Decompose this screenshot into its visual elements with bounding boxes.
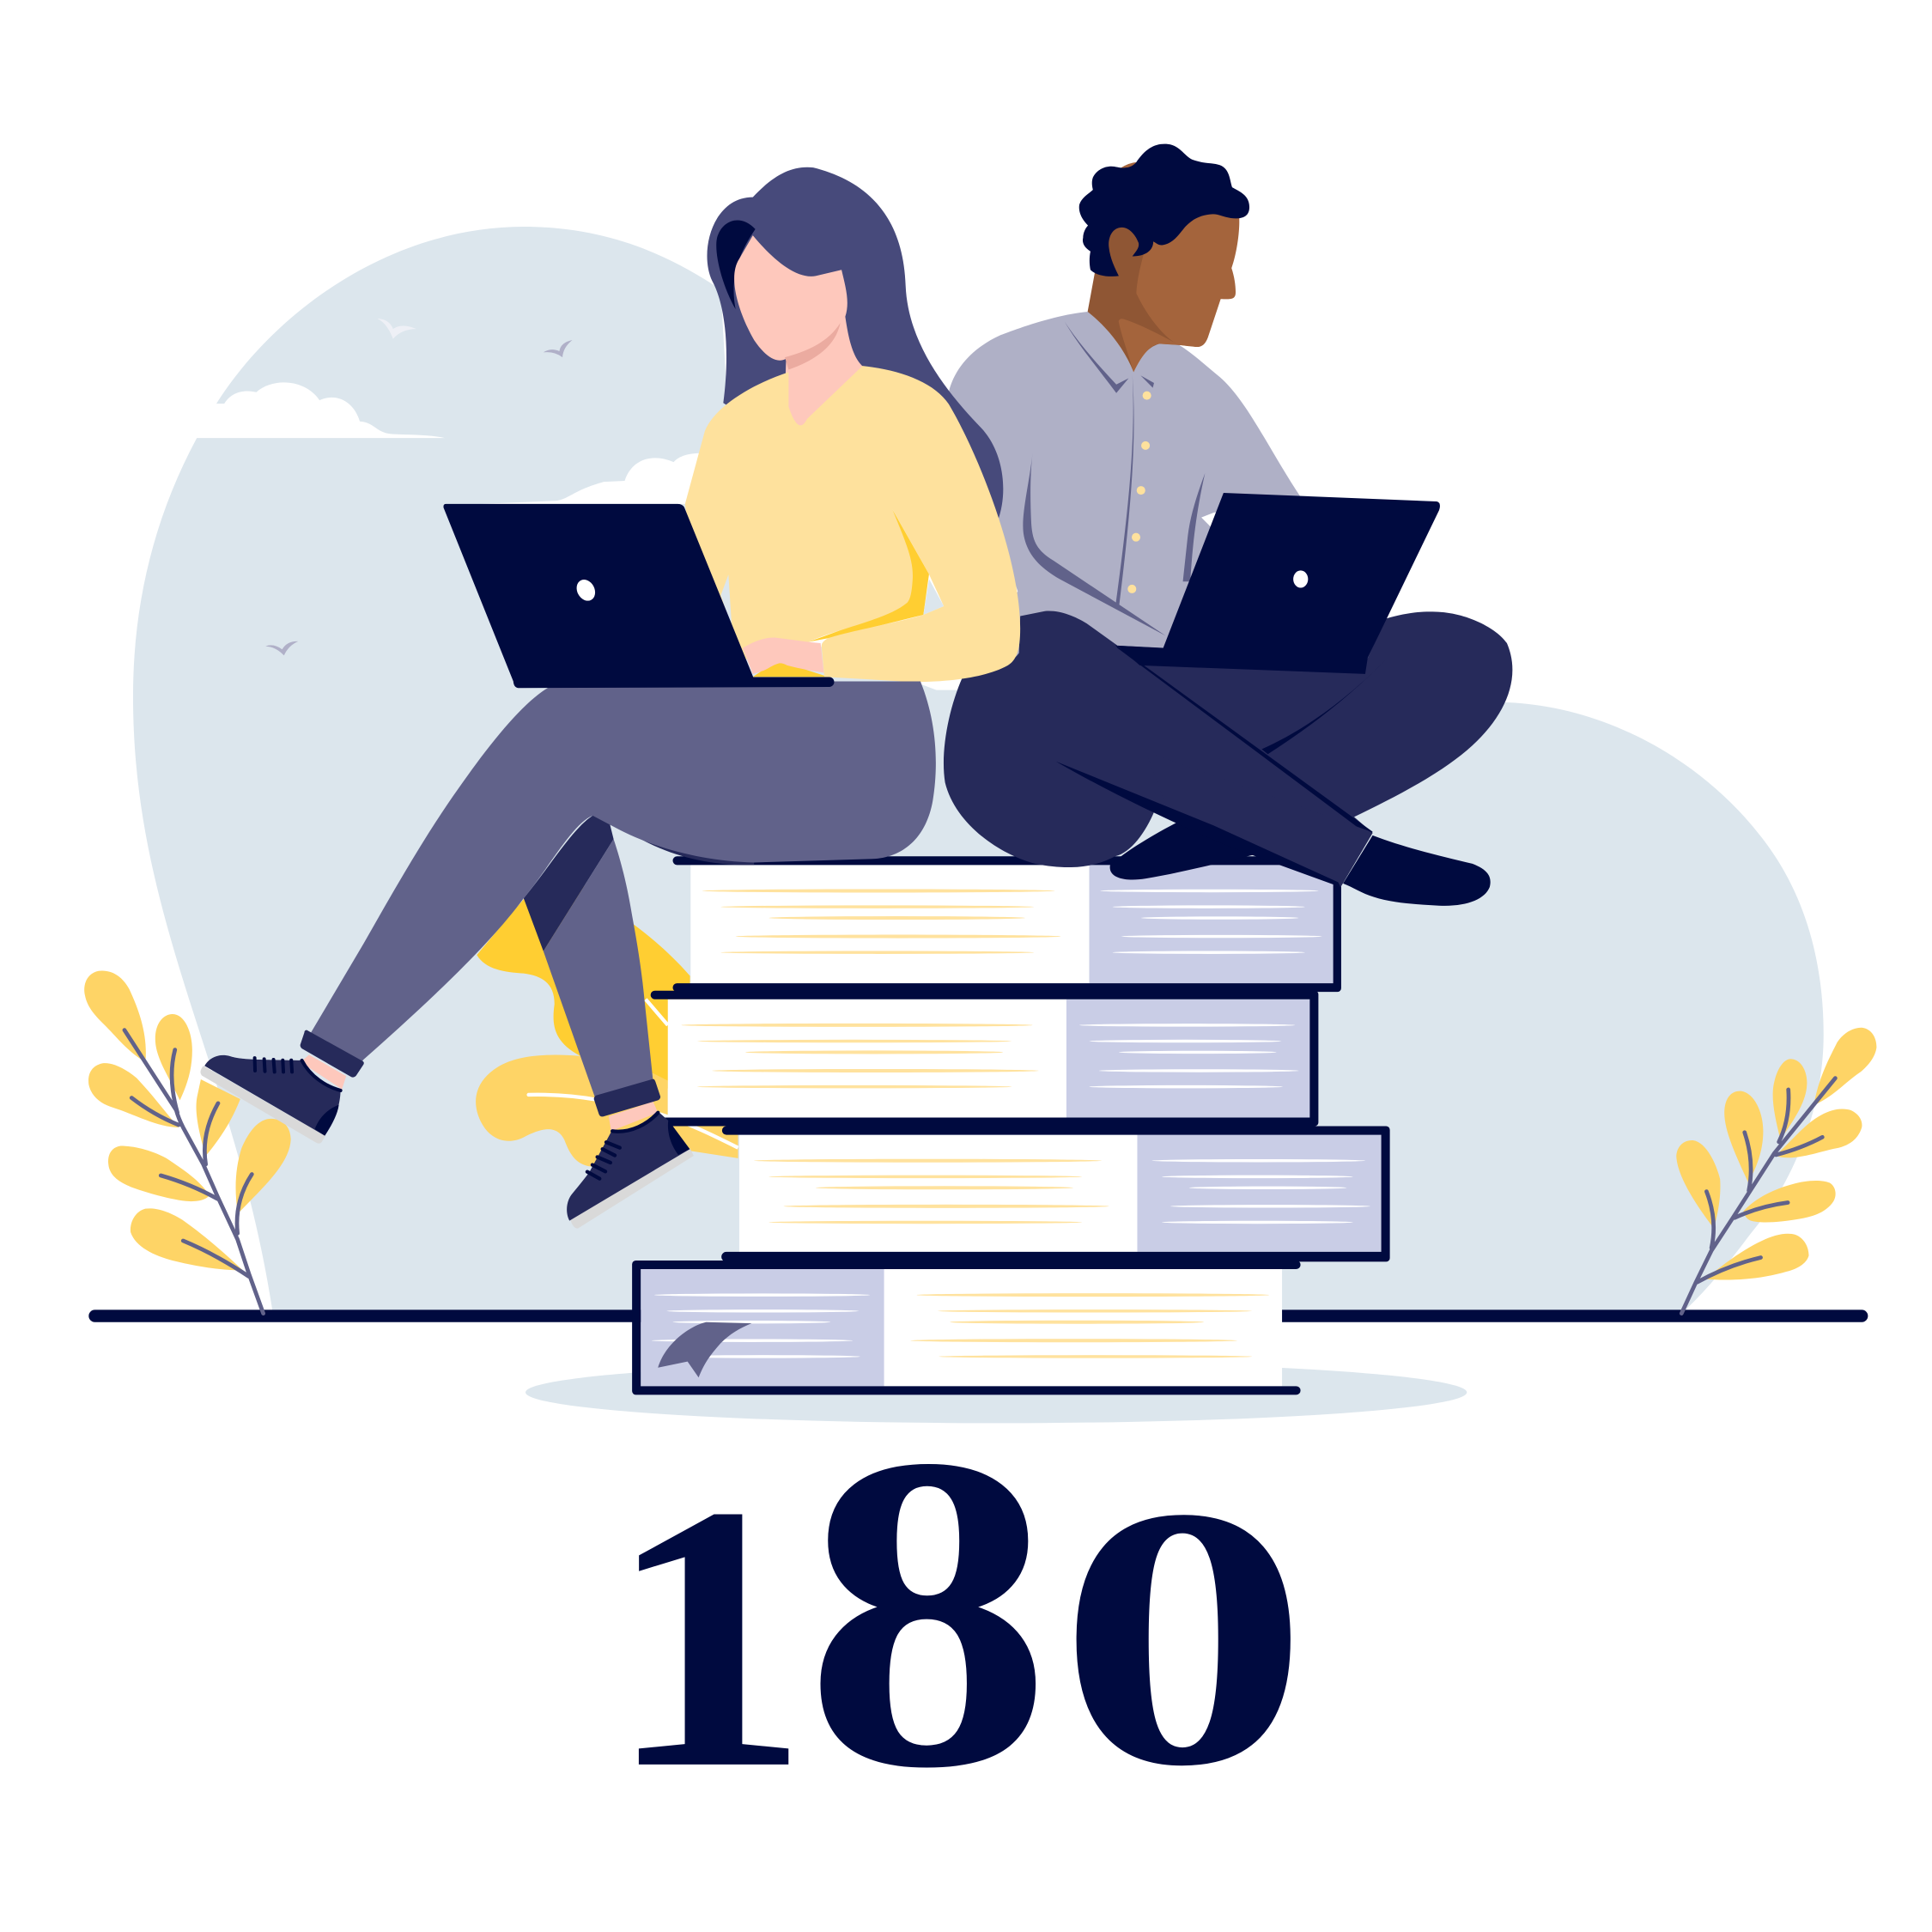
- digit 8: 8: [804, 1363, 1052, 1861]
- neck: [1088, 222, 1198, 372]
- bookmark: [658, 1322, 751, 1377]
- hair: [707, 167, 1003, 520]
- head: [1120, 162, 1239, 347]
- stack of books: [632, 856, 1390, 1394]
- plant: left: [84, 970, 291, 1314]
- far leg: cuff: [594, 1079, 660, 1116]
- top leg over foot: [1146, 751, 1373, 887]
- far shoe: [567, 1111, 690, 1221]
- big number 180: [606, 1363, 1309, 1861]
- digit 0: 0: [1057, 1431, 1309, 1843]
- plant: right: [1676, 1028, 1876, 1314]
- shirt buttons: [1127, 392, 1151, 593]
- near foot: [1343, 835, 1491, 906]
- far leg: shin: [544, 839, 653, 1098]
- far shoe sole: [570, 1148, 694, 1229]
- background hills: [133, 227, 1824, 1309]
- shirt folds: [1023, 322, 1205, 635]
- pants: [944, 611, 1512, 887]
- digit 1: 1: [606, 1426, 810, 1846]
- bird: pale: [377, 319, 416, 339]
- far shoe collar and laces: [587, 1113, 658, 1179]
- gap below elbow: [923, 579, 944, 615]
- lower crease: [1056, 762, 1340, 887]
- pants creases: [1115, 644, 1388, 836]
- far leg: knee: [524, 816, 614, 951]
- gap beside laptop: [720, 574, 732, 629]
- near shoe sole: [200, 1066, 325, 1144]
- neck shadow: [785, 323, 841, 369]
- laptop logo: man: [1293, 570, 1308, 587]
- book 3: [721, 1127, 1390, 1261]
- far foot: [1110, 821, 1263, 880]
- far shoe toe: [668, 1120, 690, 1155]
- near leg and hips: [308, 682, 936, 1065]
- hair: [1079, 144, 1249, 276]
- inner hair: [716, 221, 756, 309]
- face and neck: [734, 235, 864, 434]
- bird: lower left: [265, 641, 298, 655]
- thigh underside: [623, 828, 754, 865]
- laptop logo: woman: [573, 576, 598, 604]
- cloud: left: [185, 382, 445, 438]
- laptop: man: [1117, 493, 1440, 674]
- far leg: ankle: [609, 1102, 658, 1131]
- man: [944, 144, 1512, 906]
- chest skin: [1119, 319, 1179, 372]
- laptop: woman: [443, 504, 834, 688]
- hand underside: [753, 660, 828, 677]
- sweater shadow: [808, 509, 929, 642]
- near shoe collar and laces: [255, 1058, 341, 1091]
- woman: [200, 167, 1020, 1229]
- hand: [743, 638, 823, 674]
- shirt: [949, 312, 1301, 702]
- ground shadow ellipse: [526, 1362, 1467, 1423]
- near ankle: [301, 1054, 346, 1089]
- book 1: top: [672, 856, 1341, 992]
- bird: upper right: [544, 340, 573, 357]
- ground line: [94, 1312, 1862, 1321]
- near cuff: [301, 1030, 364, 1078]
- yellow leaf behind legs: [476, 862, 738, 1167]
- near shoe: [204, 1055, 341, 1136]
- book 4: bottom: [632, 1261, 1301, 1394]
- book 2: [651, 991, 1318, 1127]
- sweater: [685, 366, 1020, 682]
- near shoe toe: [315, 1105, 339, 1136]
- cloud: behind laptop: [481, 453, 710, 504]
